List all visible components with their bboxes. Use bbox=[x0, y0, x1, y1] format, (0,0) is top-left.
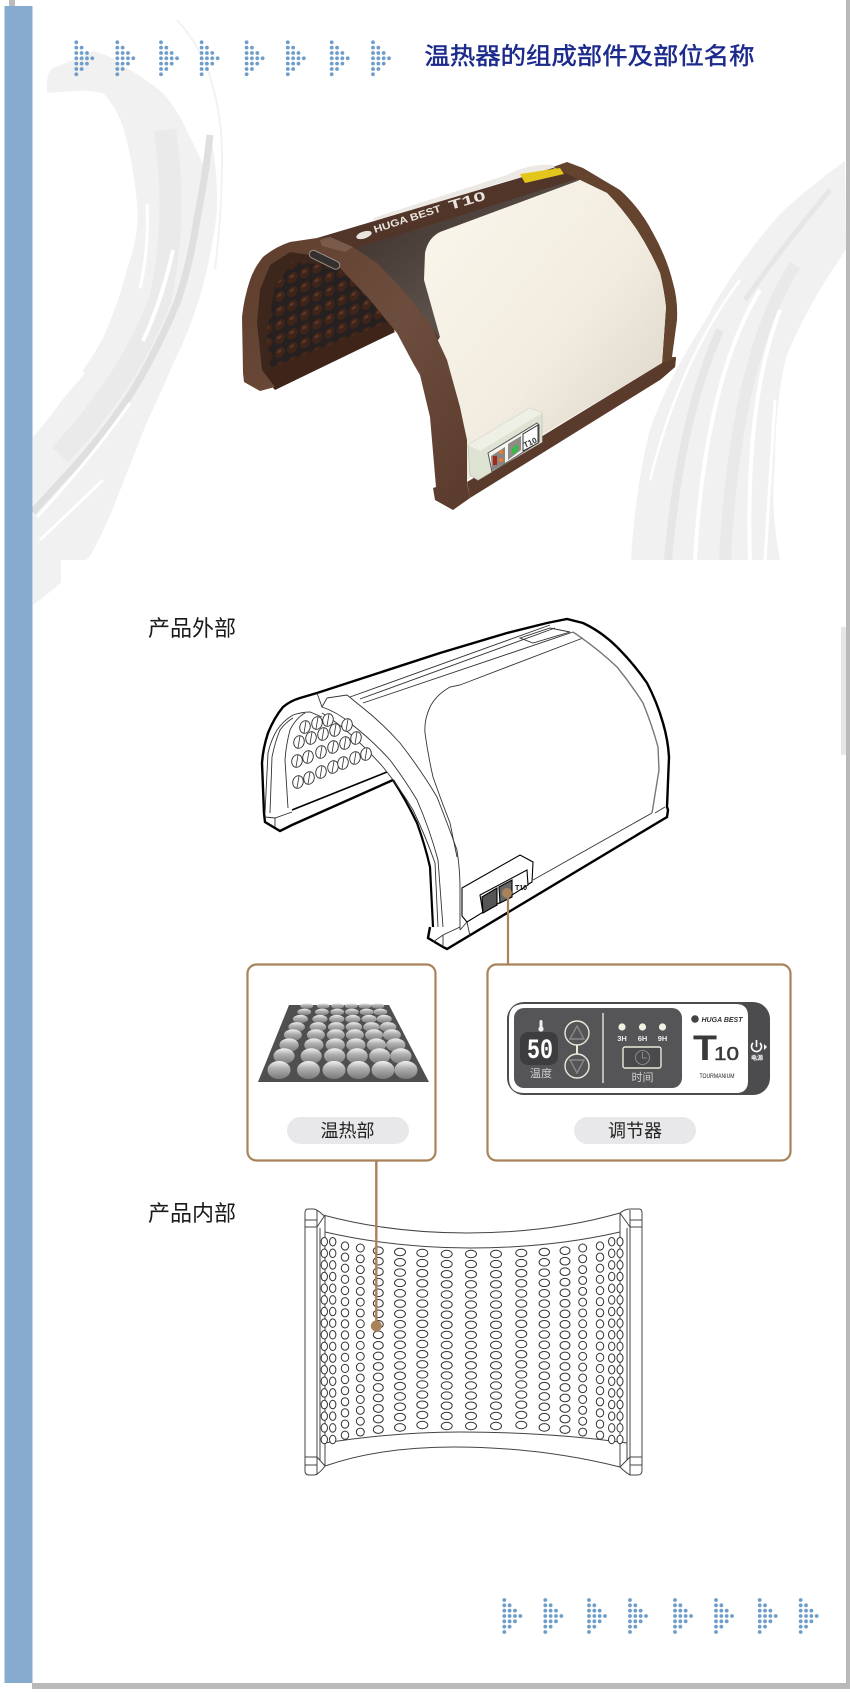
control box: T10 bbox=[522, 436, 539, 450]
model on top: T10 bbox=[447, 188, 487, 213]
far arch bbox=[553, 162, 677, 380]
far arch inner line bbox=[573, 632, 659, 813]
outline bbox=[262, 619, 669, 949]
control box line art: T10 bbox=[515, 885, 527, 892]
brand logo: HUGA BEST bbox=[702, 1015, 744, 1024]
holes bbox=[290, 712, 373, 790]
hole columns bbox=[321, 1237, 623, 1444]
time indicators: 3H bbox=[617, 1034, 627, 1043]
panel: heating part bbox=[248, 964, 436, 1160]
interior wall with heating stones bbox=[267, 262, 387, 368]
arch top tab highlight bbox=[320, 237, 353, 252]
inner lower rail bbox=[262, 322, 395, 390]
label pill: 调节器 bbox=[608, 1121, 662, 1141]
power icon bbox=[752, 1040, 767, 1052]
frame bbox=[305, 1209, 642, 1475]
brand on top: HUGA BEST bbox=[373, 204, 443, 236]
control panel bbox=[507, 1002, 770, 1095]
warning label bbox=[520, 168, 564, 183]
line drawing: interior bbox=[305, 1209, 642, 1475]
left brush sweep bbox=[33, 20, 222, 610]
thermometer icon bbox=[538, 1020, 544, 1032]
left foot and rail bbox=[264, 780, 393, 831]
temperature label: 温度 bbox=[530, 1066, 552, 1080]
bottom rail bbox=[467, 358, 676, 498]
top gray tab bbox=[9, 0, 15, 6]
model name: 10 bbox=[714, 1043, 739, 1064]
connector: heating part bbox=[371, 1161, 382, 1332]
connector: regulator bbox=[502, 888, 512, 965]
temperature display bbox=[520, 1032, 558, 1067]
time indicators: 6H bbox=[638, 1034, 647, 1043]
line drawing: exterior bbox=[262, 619, 669, 949]
bottom arrow dots bbox=[502, 1598, 819, 1634]
time label: 时间 bbox=[632, 1071, 654, 1084]
label pill: 温热部 bbox=[320, 1121, 374, 1141]
control box bbox=[468, 408, 542, 480]
power label: 电源 bbox=[751, 1054, 763, 1062]
near arch bbox=[242, 237, 470, 510]
small logo badge bbox=[308, 249, 341, 271]
background brush strokes bbox=[33, 20, 846, 755]
cream cover bbox=[424, 180, 666, 480]
left blue bar bbox=[4, 6, 32, 1683]
title: 温热器的组成部件及部位名称 bbox=[424, 43, 754, 69]
thin details bbox=[265, 625, 665, 947]
right faint stripe bbox=[841, 627, 846, 755]
inner arch thick bbox=[393, 780, 433, 927]
right brush sweep bbox=[631, 161, 846, 560]
time indicators bbox=[617, 1023, 667, 1043]
product photo: heater dome bbox=[242, 162, 677, 510]
model name bbox=[693, 1029, 739, 1068]
model name: T bbox=[693, 1029, 717, 1068]
brand on top bbox=[355, 204, 443, 241]
label pill bbox=[574, 1117, 696, 1144]
tourmanium: TOURMANIUM bbox=[700, 1073, 734, 1080]
right gray border bbox=[846, 0, 850, 1689]
time button bbox=[623, 1047, 661, 1068]
up and down buttons bbox=[565, 1021, 589, 1078]
temperature display: 50 bbox=[527, 1036, 553, 1067]
panel: regulator bbox=[488, 964, 790, 1160]
label pill bbox=[287, 1117, 409, 1144]
heating plate bbox=[258, 1003, 429, 1082]
bottom gray border bbox=[32, 1683, 850, 1689]
control box line art bbox=[462, 855, 533, 922]
inner arch return bbox=[255, 248, 395, 385]
top arrow dots bbox=[74, 40, 391, 76]
section label: interior: 产品内部 bbox=[148, 1201, 236, 1226]
section label: exterior: 产品外部 bbox=[148, 616, 236, 641]
time indicators: 9H bbox=[658, 1034, 667, 1043]
top strip and dark panel bbox=[317, 168, 583, 380]
top highlight bbox=[373, 165, 553, 222]
